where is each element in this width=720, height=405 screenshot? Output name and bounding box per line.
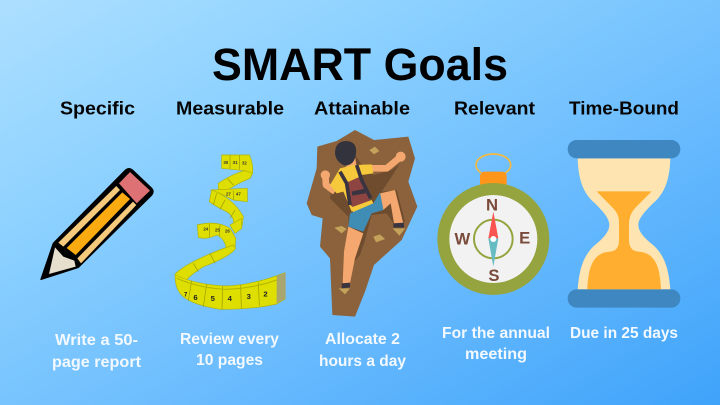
icon: measuring tape — [175, 155, 286, 309]
heading: Measurable: Measurable — [176, 98, 284, 118]
caption: Relevant: For the annual — [442, 325, 550, 342]
caption: Specific: Write a 50- — [55, 332, 138, 349]
icon: measuring tape: 47 — [236, 192, 241, 197]
caption: Measurable — [180, 331, 279, 369]
heading: Time-Bound: Time-Bound — [569, 98, 679, 118]
title: SMART Goals — [212, 39, 508, 90]
icon: compass: N — [486, 196, 498, 215]
icon: measuring tape: 25 — [215, 227, 220, 232]
caption: Relevant: meeting — [465, 346, 527, 363]
icon: hourglass — [568, 140, 680, 308]
icon: measuring tape: 30 — [223, 160, 229, 165]
icon: compass: W — [454, 230, 470, 249]
icon: measuring tape: 32 — [242, 161, 247, 166]
heading: Specific: Specific — [60, 98, 135, 118]
caption: Specific: page report — [52, 354, 141, 371]
icon: measuring tape: 5 — [211, 294, 216, 303]
rock holds — [334, 147, 405, 294]
caption: Measurable: Review every — [180, 331, 279, 348]
caption: Relevant — [442, 325, 550, 363]
icon: measuring tape: 24 — [203, 227, 209, 232]
icon: measuring tape: 3 — [247, 292, 251, 301]
climber shadow — [330, 155, 405, 267]
icon: compass: E — [519, 228, 530, 247]
icon: measuring tape: 26 — [225, 229, 230, 234]
icon: compass — [437, 154, 549, 295]
icon: rock climber — [307, 130, 417, 317]
icon: measuring tape: 27 — [226, 192, 231, 197]
climbing rock — [307, 130, 417, 317]
icon: compass: S — [488, 266, 500, 285]
icon: measuring tape: 2 — [263, 290, 268, 299]
caption: Measurable: 10 pages — [196, 352, 263, 369]
heading: Relevant: Relevant — [454, 98, 535, 118]
heading: Attainable: Attainable — [314, 98, 410, 118]
icon: pencil — [41, 169, 153, 279]
caption: Attainable — [319, 331, 406, 370]
icon: measuring tape: 4 — [228, 294, 233, 303]
caption: Attainable: hours a day — [319, 353, 406, 370]
caption: Specific — [52, 332, 141, 371]
climber figure — [321, 141, 406, 288]
icon: measuring tape: 31 — [233, 160, 238, 165]
caption: Time-Bound: Due in 25 days — [570, 325, 678, 342]
icon: measuring tape: 7 — [184, 293, 188, 299]
caption: Attainable: Allocate 2 — [325, 331, 400, 348]
icon: measuring tape: 6 — [193, 293, 198, 302]
